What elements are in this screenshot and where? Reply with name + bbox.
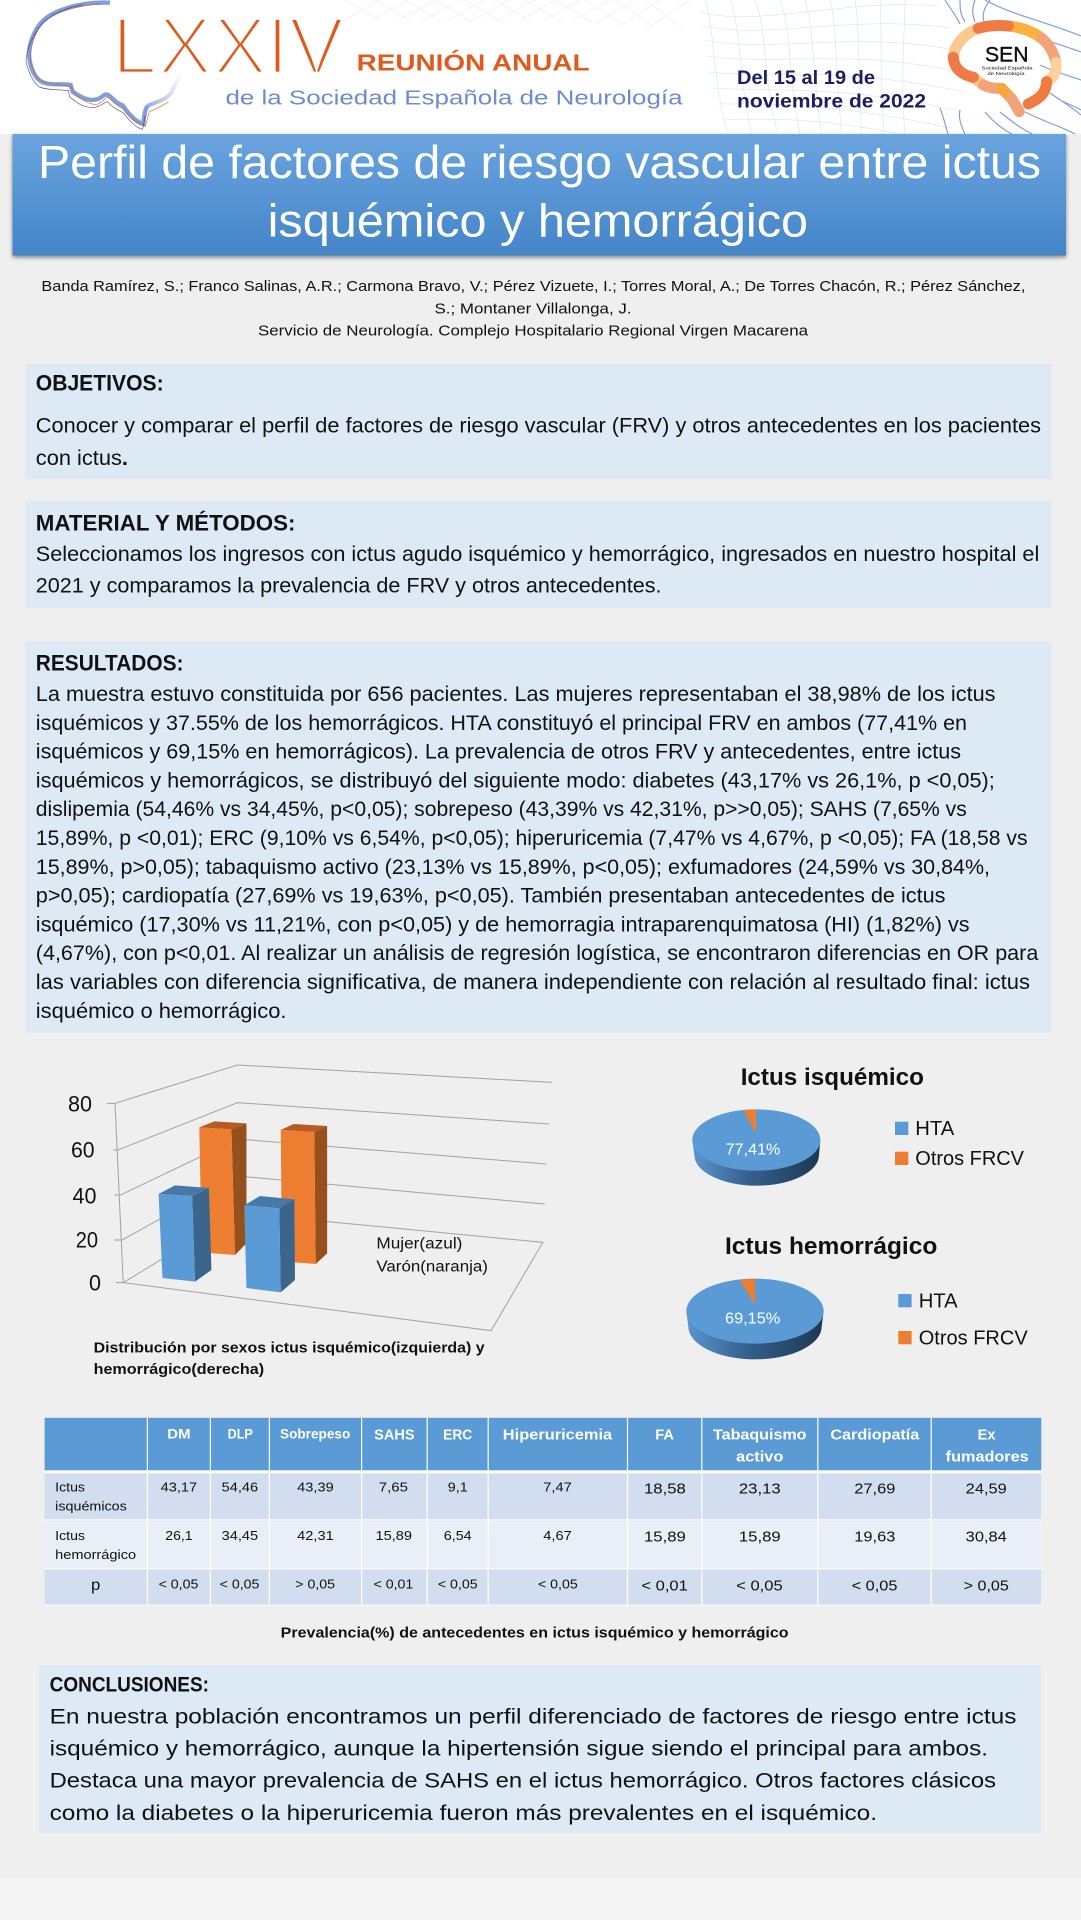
pie title: Ictus hemorrágico bbox=[725, 1233, 937, 1260]
text: objetivos body: con ictus. bbox=[36, 446, 128, 470]
heading: resultados: RESULTADOS: bbox=[36, 651, 183, 676]
heading: conclusiones: CONCLUSIONES: bbox=[50, 1674, 209, 1697]
table row: ictus hemorrágico: 15,89 bbox=[376, 1529, 412, 1543]
table row: ictus hemorrágico: 42,31 bbox=[297, 1529, 334, 1543]
text: resultados body: dislipemia (54,46% vs 34,45%, p<0,05); sobrepeso (43,39% vs 42,31%, p>>0,05); SAHS (7,65% vs bbox=[36, 797, 967, 821]
table header row: fumadores bbox=[946, 1450, 1029, 1466]
text: conclusiones body: En nuestra población encontramos un perfil diferenciado de factores de riesgo entre ictus bbox=[50, 1704, 1016, 1728]
title banner bbox=[12, 134, 1066, 256]
pie chart: ictus isquémico bbox=[692, 1064, 1024, 1186]
table row: ictus isquémicos: 9,1 bbox=[448, 1481, 468, 1495]
meeting label: REUNIÓN ANUAL bbox=[357, 49, 590, 76]
authors and affiliation: Servicio de Neurología. Complejo Hospitalario Regional Virgen Macarena bbox=[258, 322, 809, 339]
table row: ictus hemorrágico: 34,45 bbox=[222, 1529, 258, 1543]
icon: SEN logo: de Neurología bbox=[988, 71, 1025, 77]
table row: ictus isquémicos: isquémicos bbox=[55, 1500, 127, 1514]
icon: SEN logo: SEN bbox=[985, 44, 1028, 67]
table header row: Sobrepeso bbox=[280, 1426, 350, 1441]
table row: ictus hemorrágico bbox=[45, 1520, 1041, 1568]
table row: p: < 0,05 bbox=[538, 1577, 578, 1591]
table caption: Prevalencia(%) de antecedentes en ictus isquémico y hemorrágico bbox=[281, 1625, 789, 1641]
text: resultados body: p>0,05); cardiopatía (27,69% vs 19,63%, p<0,05). También presentaban antecedentes de ictus bbox=[36, 884, 945, 908]
heading: objetivos: OBJETIVOS: bbox=[36, 371, 164, 396]
table row: ictus hemorrágico: 4,67 bbox=[543, 1529, 572, 1543]
roman numeral bbox=[112, 1, 344, 91]
table header row: FA bbox=[655, 1427, 674, 1443]
y axis labels: 40 bbox=[72, 1183, 96, 1208]
table row: p: < 0,05 bbox=[852, 1579, 897, 1595]
pie graphic bbox=[686, 1279, 824, 1359]
y axis labels: 80 bbox=[68, 1092, 92, 1117]
pie title: Ictus isquémico bbox=[741, 1064, 924, 1091]
text: resultados body: isquémicos y hemorrágicos, se distribuyó del siguiente modo: diabetes (43,17% vs 26,1%, p <0,05); bbox=[36, 768, 995, 792]
y axis labels: 60 bbox=[71, 1138, 95, 1163]
bar: varón isquémico bbox=[199, 1121, 246, 1255]
text: objetivos body: Conocer y comparar el perfil de factores de riesgo vascular (FRV) y otros antecedentes en los pacientes bbox=[36, 413, 1041, 437]
table: prevalencia bbox=[45, 1417, 1042, 1606]
pie legend: Otros FRCV bbox=[915, 1147, 1024, 1170]
table header row: DM bbox=[167, 1426, 190, 1441]
pie legend: HTA bbox=[919, 1290, 958, 1313]
chart plot: walls and bars bbox=[107, 1065, 552, 1331]
dates: Del 15 al 19 de bbox=[737, 68, 875, 89]
dates bbox=[737, 68, 926, 112]
text: resultados body: 15,89%, p>0,05); tabaquismo activo (23,13% vs 15,89%, p<0,05); exfumadores (24,59% vs 30,84%, bbox=[36, 855, 990, 879]
table header row: activo bbox=[736, 1450, 783, 1466]
table header row: Tabaquismo bbox=[713, 1427, 807, 1443]
table row: ictus isquémicos bbox=[45, 1473, 1041, 1519]
table row: ictus isquémicos: 43,39 bbox=[297, 1481, 334, 1495]
text: conclusiones body: isquémico y hemorrágico, aunque la hipertensión sigue siendo el principal para ambos. bbox=[50, 1736, 988, 1760]
table row: ictus hemorrágico: 15,89 bbox=[644, 1530, 686, 1546]
legend text bbox=[376, 1235, 488, 1275]
pie value: 69,15% bbox=[725, 1310, 780, 1327]
table row: ictus hemorrágico: Ictus bbox=[55, 1529, 85, 1543]
table row: ictus isquémicos: 18,58 bbox=[644, 1481, 686, 1497]
text: resultados body: las variables con diferencia significativa, de manera independiente con relación al resultado final: ictus bbox=[36, 970, 1030, 994]
text: resultados body: isquémicos y 69,15% en hemorrágicos). La prevalencia de otros FRV y antecedentes, entre ictus bbox=[36, 740, 961, 764]
header banner bbox=[0, 0, 1081, 134]
table row: p: p bbox=[91, 1577, 100, 1594]
table row: ictus isquémicos: Ictus bbox=[55, 1481, 85, 1495]
table row: p: < 0,05 bbox=[220, 1577, 259, 1591]
table row: ictus hemorrágico: 15,89 bbox=[739, 1530, 781, 1546]
text: material y métodos body bbox=[36, 542, 1039, 597]
table row: ictus hemorrágico: 6,54 bbox=[444, 1529, 472, 1543]
table row: p: > 0,05 bbox=[295, 1577, 335, 1591]
authors and affiliation: S.; Montaner Villalonga, J. bbox=[434, 301, 632, 318]
table row: ictus hemorrágico: 26,1 bbox=[165, 1529, 192, 1543]
pie chart: ictus hemorrágico bbox=[686, 1233, 1028, 1359]
pie legend bbox=[895, 1117, 1024, 1170]
y axis labels: 20 bbox=[76, 1228, 98, 1253]
text: resultados body: isquémico (17,30% vs 11,21%, con p<0,05) y de hemorragia intraparenquimatosa (HI) (1,82%) vs bbox=[36, 912, 970, 936]
text: objetivos body bbox=[36, 413, 1041, 470]
table row: ictus isquémicos: 23,13 bbox=[739, 1481, 781, 1497]
table row: ictus hemorrágico: hemorrágico bbox=[55, 1548, 136, 1562]
text: conclusiones body: como la diabetes o la hiperuricemia fueron más prevalentes en el isquémico. bbox=[50, 1801, 877, 1825]
y axis labels: 0 bbox=[89, 1271, 101, 1296]
legend text: Mujer(azul) bbox=[376, 1235, 462, 1252]
roman numeral: V bbox=[289, 1, 344, 91]
authors and affiliation bbox=[41, 278, 1025, 339]
table row: ictus isquémicos: 7,47 bbox=[543, 1481, 572, 1495]
text: conclusiones body: Destaca una mayor prevalencia de SAHS en el ictus hemorrágico. Otros factores clásicos bbox=[50, 1768, 996, 1792]
table row: p: > 0,05 bbox=[964, 1579, 1009, 1595]
table row: ictus isquémicos: 43,17 bbox=[161, 1481, 197, 1495]
authors and affiliation: Banda Ramírez, S.; Franco Salinas, A.R.; Carmona Bravo, V.; Pérez Vizuete, I.; Torres Moral, A.; De Torres Chacón, R.; Pérez Sánchez, bbox=[41, 278, 1025, 295]
pie legend bbox=[898, 1290, 1028, 1350]
icon: SEN logo bbox=[953, 25, 1056, 112]
table row: p: < 0,01 bbox=[374, 1577, 413, 1591]
table row: ictus isquémicos: 54,46 bbox=[222, 1481, 258, 1495]
pie value: 77,41% bbox=[726, 1141, 780, 1158]
roman numeral: L bbox=[112, 1, 157, 91]
roman numeral: X bbox=[158, 1, 212, 91]
table header row: SAHS bbox=[374, 1427, 415, 1443]
chart caption: Distribución por sexos ictus isquémico(izquierda) y bbox=[94, 1340, 485, 1356]
y axis labels bbox=[68, 1092, 101, 1296]
icon: SEN logo: Sociedad Española bbox=[982, 66, 1033, 72]
text: resultados body: 15,89%, p <0,01); ERC (9,10% vs 6,54%, p<0,05); hiperuricemia (7,47% vs 4,67%, p <0,05); FA (18,58 vs bbox=[36, 826, 1028, 850]
3D bar chart: distribution by sex bbox=[68, 1065, 552, 1378]
chart caption: hemorrágico(derecha) bbox=[94, 1362, 264, 1378]
text: resultados body: isquémicos y 37.55% de los hemorrágicos. HTA constituyó el principal FRV en ambos (77,41% en bbox=[36, 711, 967, 735]
table row: ictus isquémicos: 24,59 bbox=[966, 1481, 1007, 1497]
bar: mujer hemorrágico bbox=[244, 1196, 295, 1292]
text: resultados body: (4,67%), con p<0,01. Al realizar un análisis de regresión logística, se encontraron diferencias en OR para bbox=[36, 941, 1038, 965]
icon: brain outline bbox=[26, 3, 183, 129]
society name: de la Sociedad Española de Neurología bbox=[226, 87, 683, 110]
table row: p: < 0,05 bbox=[438, 1577, 478, 1591]
roman numeral: X bbox=[213, 1, 267, 91]
text: conclusiones body bbox=[50, 1704, 1016, 1825]
table row: ictus isquémicos: 27,69 bbox=[854, 1481, 895, 1497]
title banner: Perfil de factores de riesgo vascular entre ictus bbox=[38, 136, 1041, 188]
text: resultados body: La muestra estuvo constituida por 656 pacientes. Las mujeres representaban el 38,98% de los ictus bbox=[36, 682, 996, 706]
pie graphic bbox=[692, 1109, 820, 1186]
table row: ictus hemorrágico: 30,84 bbox=[966, 1530, 1007, 1546]
text: resultados body: isquémico o hemorrágico. bbox=[36, 999, 286, 1023]
heading: material y métodos: MATERIAL Y MÉTODOS: bbox=[36, 510, 296, 535]
legend text: Varón(naranja) bbox=[376, 1258, 488, 1275]
title banner: isquémico y hemorrágico bbox=[268, 195, 808, 247]
table row: ictus hemorrágico: 19,63 bbox=[854, 1530, 895, 1546]
table row: p: < 0,01 bbox=[641, 1579, 688, 1595]
chart caption bbox=[94, 1340, 485, 1378]
table row: p: < 0,05 bbox=[736, 1579, 783, 1595]
table header row: Hiperuricemia bbox=[503, 1427, 613, 1443]
text: resultados body bbox=[36, 682, 1038, 1023]
table header row: DLP bbox=[228, 1426, 253, 1441]
panel: resultados bbox=[26, 642, 1052, 1032]
table header row: Cardiopatía bbox=[830, 1427, 920, 1443]
table header row: ERC bbox=[443, 1427, 473, 1443]
text: material y métodos body: Seleccionamos los ingresos con ictus agudo isquémico y hemorrágico, ingresados en nuestro hospital el bbox=[36, 542, 1039, 566]
table row: p: < 0,05 bbox=[159, 1577, 198, 1591]
panel: conclusiones bbox=[39, 1665, 1041, 1833]
panel: material y métodos bbox=[26, 501, 1052, 608]
pie legend: Otros FRCV bbox=[919, 1327, 1028, 1350]
roman numeral: I bbox=[266, 1, 289, 91]
bar: mujer isquémico bbox=[159, 1185, 211, 1282]
table header row: Ex bbox=[978, 1427, 996, 1443]
table header row bbox=[45, 1418, 1041, 1470]
dates: noviembre de 2022 bbox=[737, 91, 926, 112]
table row: p bbox=[45, 1569, 1041, 1605]
text: material y métodos body: 2021 y comparamos la prevalencia de FRV y otros antecedentes. bbox=[36, 573, 662, 597]
bar: varón hemorrágico bbox=[281, 1124, 327, 1264]
table row: ictus isquémicos: 7,65 bbox=[379, 1481, 408, 1495]
panel: objetivos bbox=[26, 364, 1052, 479]
pie legend: HTA bbox=[915, 1117, 955, 1140]
